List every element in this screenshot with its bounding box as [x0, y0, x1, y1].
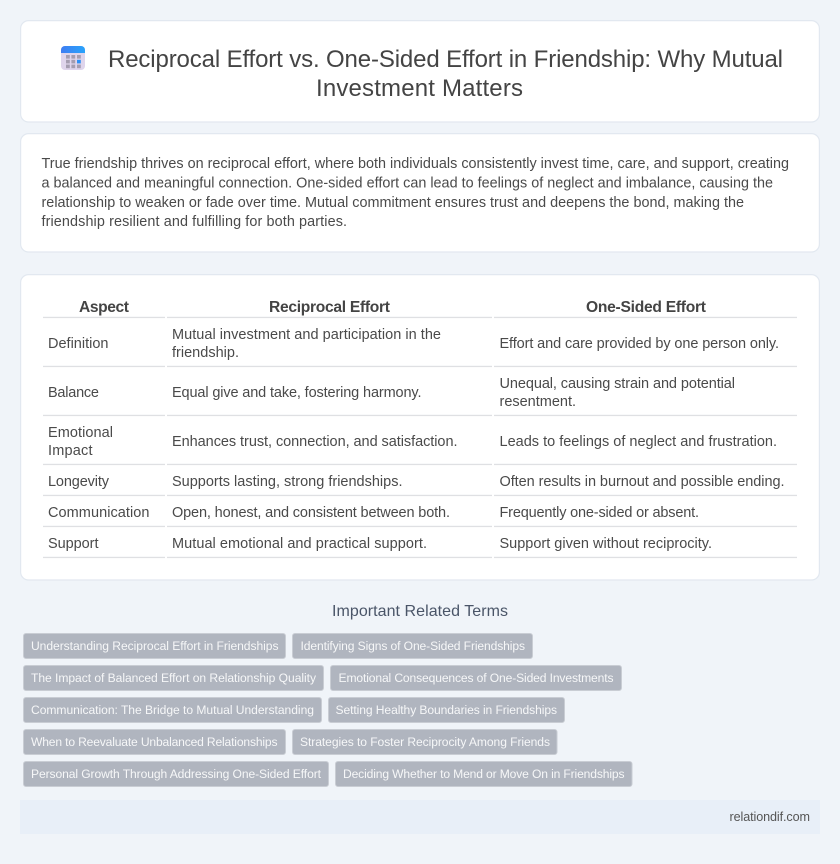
- table header row: One-Sided Effort: [586, 299, 706, 316]
- text block: introduction paragraph: relationship to weaken or fade over time. Mutual commitment ensures trust and deepens the bond, making the: [42, 195, 744, 211]
- table row: communication: Frequently one-sided or absent.: [500, 505, 699, 521]
- panel: comparison table: [21, 275, 819, 580]
- table row: support: Mutual emotional and practical support.: [172, 536, 427, 552]
- tag row 1: Understanding Reciprocal Effort in Friendships: [31, 639, 278, 653]
- tag row 2: The Impact of Balanced Effort on Relationship Quality: [31, 671, 317, 685]
- tag row 4: Strategies to Foster Reciprocity Among Friends: [300, 735, 550, 749]
- title: [108, 46, 783, 102]
- tag row 3: Communication: The Bridge to Mutual Understanding: [31, 703, 314, 717]
- text block: introduction paragraph: True friendship thrives on reciprocal effort, where both individuals consistently invest time, care, and support, creating: [42, 156, 789, 172]
- table row: balance: Unequal, causing strain and potential: [500, 376, 735, 392]
- table row: support: Support given without reciprocity.: [500, 536, 712, 552]
- table row: longevity: Often results in burnout and possible ending.: [500, 474, 784, 490]
- table row: longevity: Supports lasting, strong friendships.: [172, 474, 402, 490]
- tag row 5: [24, 762, 632, 786]
- table row: emotional impact: [48, 425, 777, 459]
- tag row 4: [24, 730, 557, 754]
- table row: support: [48, 536, 712, 552]
- table row: balance: resentment.: [500, 394, 576, 410]
- panel: introduction: [21, 134, 819, 252]
- table row: emotional impact: Leads to feelings of neglect and frustration.: [500, 434, 777, 450]
- text block: introduction paragraph: friendship resilient and fulfilling for both parties.: [42, 214, 347, 230]
- table header row: [79, 299, 706, 316]
- tag row 3: Setting Healthy Boundaries in Friendships: [336, 703, 557, 717]
- table row: communication: [48, 505, 699, 521]
- tag row 1: Identifying Signs of One-Sided Friendships: [300, 639, 525, 653]
- text block: introduction paragraph: [42, 156, 789, 230]
- table header row: Reciprocal Effort: [269, 299, 390, 316]
- tag row 5: Deciding Whether to Mend or Move On in Friendships: [343, 767, 624, 781]
- heading: related terms: Important Related Terms: [332, 603, 508, 620]
- table row: emotional impact: Emotional: [48, 425, 113, 441]
- tag row 2: [24, 666, 622, 690]
- table row: longevity: Longevity: [48, 474, 110, 490]
- title: Reciprocal Effort vs. One-Sided Effort in Friendship: Why Mutual: [108, 46, 783, 73]
- table row: definition: [48, 327, 779, 361]
- panel: related term tags: [24, 634, 632, 786]
- panel: page header: [21, 21, 819, 122]
- table row: communication: Open, honest, and consistent between both.: [172, 505, 450, 521]
- table row: emotional impact: Impact: [48, 443, 92, 459]
- tag row 5: Personal Growth Through Addressing One-Sided Effort: [31, 767, 322, 781]
- tag row 2: Emotional Consequences of One-Sided Investments: [338, 671, 614, 685]
- icon: calendar: [61, 46, 85, 70]
- tag row 4: When to Reevaluate Unbalanced Relationships: [31, 735, 278, 749]
- table row: definition: friendship.: [172, 345, 239, 361]
- table row: support: Support: [48, 536, 98, 552]
- table row: definition: Mutual investment and participation in the: [172, 327, 441, 343]
- tag row 3: [24, 698, 564, 722]
- table row: balance: [48, 376, 735, 410]
- table row: balance: Balance: [48, 385, 99, 401]
- footer: relationdif.com: [730, 810, 810, 824]
- table header row: Aspect: [79, 299, 129, 316]
- table row: communication: Communication: [48, 505, 150, 521]
- table row: definition: Effort and care provided by one person only.: [500, 336, 779, 352]
- table row: emotional impact: Enhances trust, connection, and satisfaction.: [172, 434, 458, 450]
- table row: definition: Definition: [48, 336, 108, 352]
- table row: longevity: [48, 474, 784, 490]
- tag row 1: [24, 634, 532, 658]
- title: Investment Matters: [316, 75, 523, 102]
- text block: introduction paragraph: a balanced and meaningful connection. One-sided effort can lead to feelings of neglect and imbalance, causing the: [42, 176, 773, 192]
- table row: balance: Equal give and take, fostering harmony.: [172, 385, 422, 401]
- footer: [20, 800, 820, 834]
